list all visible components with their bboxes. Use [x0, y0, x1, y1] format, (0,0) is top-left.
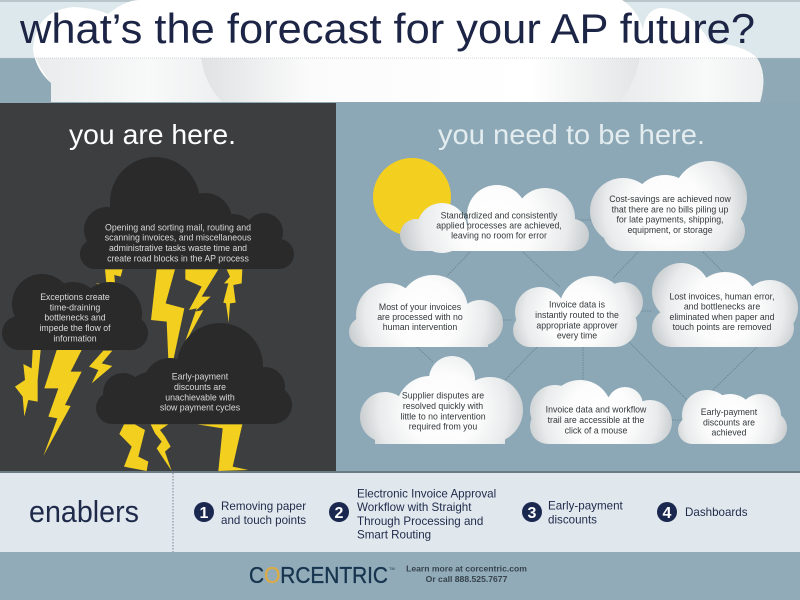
cloud: lost invoices: touch points are removed	[673, 322, 771, 332]
cloud: supplier disputes: resolved quickly with	[403, 401, 483, 411]
enabler 2: Electronic Invoice Approval	[357, 488, 496, 500]
enabler 1: Removing paper	[221, 500, 306, 513]
cloud: discounts achieved	[678, 390, 787, 444]
cloud: discounts achieved: discounts are	[703, 417, 755, 427]
cloud: lost invoices: Lost invoices, human error,	[669, 291, 775, 301]
contact: Learn more at corcentric.com	[406, 564, 527, 574]
enablers band	[0, 471, 800, 552]
cloud: lost invoices	[652, 263, 798, 347]
enabler 3: Early-payment	[548, 500, 624, 512]
cloud: standardized processes	[400, 185, 589, 253]
cloud: discounts achieved: Early-payment	[701, 407, 758, 417]
heading: you are here: you are here.	[69, 119, 236, 150]
cloud: accessible data: trail are accessible at the	[548, 415, 645, 425]
enabler 2	[329, 488, 496, 542]
cloud: lost invoices: and bottlenecks are	[684, 302, 760, 312]
storm cloud: manual tasks	[80, 157, 294, 269]
cloud: discounts achieved: achieved	[711, 428, 747, 438]
storm cloud: manual tasks: create road blocks in the AP process	[107, 253, 250, 263]
cloud: standardized processes: applied processes are achieved,	[436, 221, 562, 231]
cloud: supplier disputes: Supplier disputes are	[402, 391, 484, 401]
storm cloud: early-payment: slow payment cycles	[160, 403, 241, 413]
cloud: no human intervention	[349, 275, 503, 347]
heading: enablers: enablers	[29, 494, 139, 529]
connector lines	[417, 220, 757, 420]
storm cloud: early-payment: Early-payment	[172, 372, 229, 382]
storm cloud: exceptions: time-draining	[50, 302, 100, 312]
panel: you need to be here	[336, 103, 800, 471]
header clouds	[0, 0, 800, 102]
cloud: standardized processes: leaving no room for error	[451, 231, 547, 241]
cloud: no human intervention: are processed with no	[377, 312, 463, 322]
enabler 2: Workflow with Straight	[357, 501, 472, 514]
storm cloud: manual tasks: Opening and sorting mail, routing and	[105, 222, 251, 232]
storm cloud: exceptions: information	[53, 333, 97, 343]
cloud: supplier disputes: little to no intervention	[400, 411, 486, 421]
storm cloud: exceptions	[2, 274, 148, 350]
cloud: cost savings: Cost-savings are achieved now	[609, 194, 731, 204]
enabler 3: 3	[528, 505, 537, 522]
cloud: cost savings: equipment, or storage	[627, 225, 713, 235]
logo: TM	[389, 566, 395, 571]
enabler 1: and touch points	[221, 514, 306, 527]
cloud: no human intervention: human intervention	[383, 322, 457, 332]
enabler 1: 1	[200, 505, 209, 522]
enabler 2: Through Processing and	[357, 515, 483, 528]
cloud: standardized processes: Standardized and consistently	[441, 210, 558, 220]
header background	[0, 0, 800, 103]
logo: CORCENTRIC	[249, 562, 388, 588]
storm cloud: manual tasks: scanning invoices, and miscellaneous	[105, 233, 252, 243]
contact: Or call 888.525.7677	[426, 574, 508, 584]
storm cloud: manual tasks: administrative tasks waste time and	[109, 243, 247, 253]
storm cloud: early-payment: unachievable with	[165, 392, 235, 402]
enabler 3	[522, 500, 624, 526]
storm cloud: exceptions: impede the flow of	[39, 323, 111, 333]
cloud: cost savings: that there are no bills piling up	[612, 204, 728, 214]
title: what’s the forecast for your AP future?	[19, 5, 755, 52]
storm cloud: early-payment: discounts are	[174, 382, 226, 392]
cloud: supplier disputes	[360, 356, 523, 444]
cloud: no human intervention: Most of your invoices	[379, 302, 462, 312]
storm cloud: exceptions: bottlenecks and	[44, 313, 106, 323]
cloud: accessible data: Invoice data and workflow	[546, 405, 647, 415]
footer	[0, 552, 800, 600]
lightning bolts	[15, 269, 248, 471]
cloud: lost invoices: eliminated when paper and	[669, 312, 775, 322]
storm cloud: early-payment	[96, 323, 292, 424]
cloud: cost savings	[590, 161, 747, 251]
cloud: invoice routing: instantly routed to the	[535, 310, 619, 320]
enabler 4: 4	[663, 505, 672, 522]
cloud: supplier disputes: required from you	[409, 421, 477, 431]
panel: you are here	[0, 103, 336, 471]
icon: sun	[373, 158, 451, 236]
cloud: invoice routing	[513, 276, 643, 347]
heading: you need to be here: you need to be here.	[438, 119, 705, 150]
enabler 1	[194, 500, 306, 527]
enabler 2: 2	[335, 505, 344, 522]
cloud: invoice routing: Invoice data is	[549, 300, 606, 310]
cloud: invoice routing: appropriate approver	[536, 320, 618, 330]
storm cloud: exceptions: Exceptions create	[40, 292, 110, 302]
enabler 4: Dashboards	[685, 506, 748, 519]
cloud: cost savings: for late payments, shipping,	[616, 215, 724, 225]
cloud: accessible data	[530, 380, 672, 444]
cloud: accessible data: click of a mouse	[565, 425, 627, 435]
enabler 2: Smart Routing	[357, 528, 431, 542]
enabler 3: discounts	[548, 514, 597, 526]
enabler 4	[657, 502, 748, 522]
cloud: invoice routing: every time	[557, 330, 597, 340]
